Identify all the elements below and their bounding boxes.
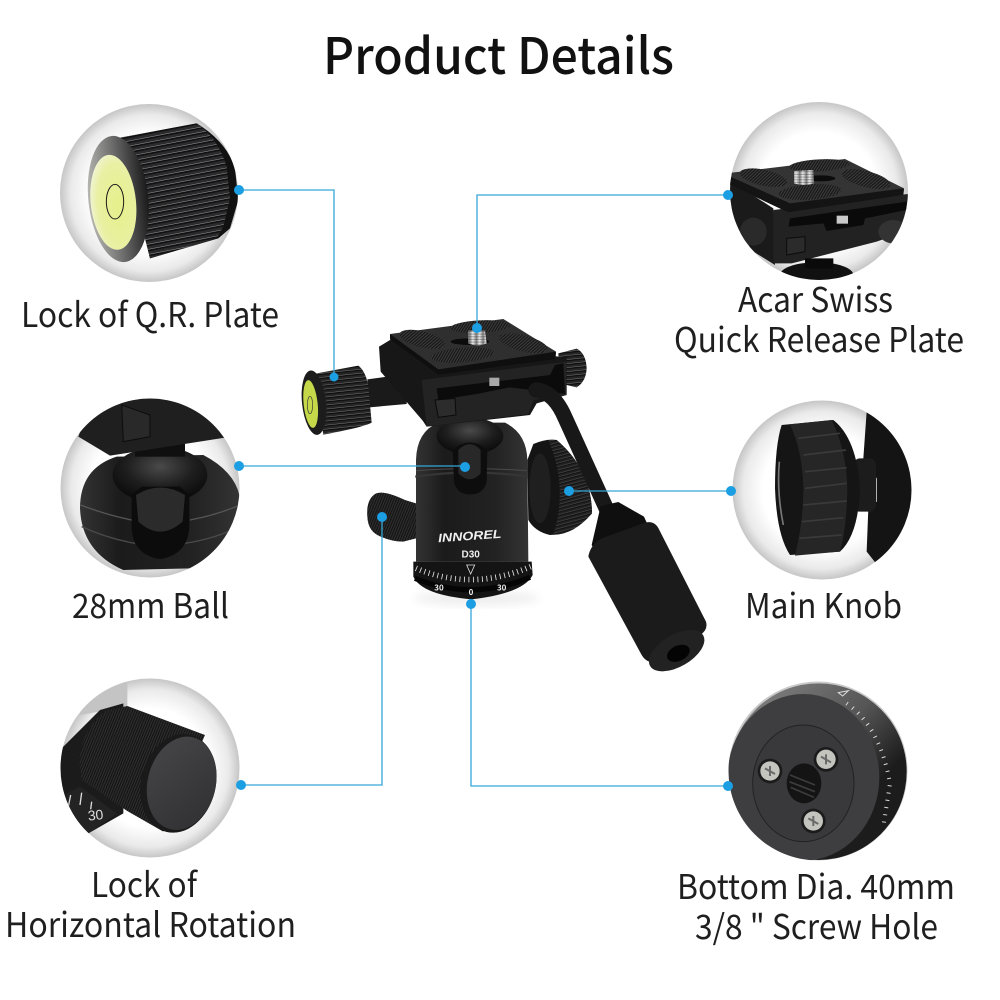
base underside close-up: [727, 683, 907, 861]
label: Main Knob: [745, 579, 902, 628]
label line 1: Bottom Dia. 40mm: [677, 860, 955, 909]
ball head body: [413, 418, 533, 599]
callout: ball connector: [234, 461, 470, 472]
knurled knob close-up: [82, 123, 238, 265]
model name: D30: [462, 550, 480, 561]
small rotation lock knob: [367, 493, 416, 542]
callout: main knob connector: [564, 486, 736, 496]
label line 2: Horizontal Rotation: [5, 898, 296, 947]
panel: 28mm Ball: [60, 395, 241, 628]
rotation lock close-up: 30: [87, 806, 104, 824]
label line 1: Acar Swiss: [738, 273, 893, 322]
callout: quick release plate connector: [472, 190, 733, 333]
plate close-up: [730, 159, 908, 280]
label line 2: Quick Release Plate: [674, 313, 964, 362]
panel: Bottom Dia. 40mm: [677, 682, 955, 949]
dial numbers: 30: [434, 582, 444, 593]
callout: bottom connector: [466, 599, 733, 791]
central product: ball head with handle: [299, 319, 711, 680]
panel: Quick Release Plate: [674, 102, 964, 362]
left knob shaft: [367, 374, 407, 407]
dial numbers: 0: [469, 587, 474, 598]
callout: horizontal rotation lock connector: [236, 512, 387, 790]
label line 2: 3/8 " Screw Hole: [695, 900, 938, 949]
label: 28mm Ball: [72, 579, 229, 628]
ball close-up: [78, 395, 241, 570]
left knob with spirit level: [299, 366, 372, 436]
panel: Lock of Horizontal Rotation: [5, 677, 296, 947]
foam grip handle: [588, 502, 711, 680]
panel: Main Knob: [732, 400, 913, 628]
rotation lock close-up: [60, 682, 217, 834]
top plate with pads and screw: [390, 319, 556, 375]
big main knob: [527, 440, 592, 535]
dial numbers: [434, 582, 507, 598]
right small knob: [558, 349, 587, 387]
clamp block: [379, 340, 567, 427]
panel: Lock of Q.R. Plate: [21, 104, 279, 337]
brand logo: INNOREL: [438, 527, 502, 545]
handle arm: [536, 390, 607, 509]
callout: Q.R. plate lock connector: [234, 185, 338, 382]
index triangle: [467, 565, 475, 574]
main knob close-up: [775, 412, 913, 568]
label line 1: Lock of: [91, 858, 199, 907]
title: Product Details: [323, 17, 674, 89]
dial numbers: 30: [497, 583, 507, 594]
label: Lock of Q.R. Plate: [21, 288, 279, 337]
